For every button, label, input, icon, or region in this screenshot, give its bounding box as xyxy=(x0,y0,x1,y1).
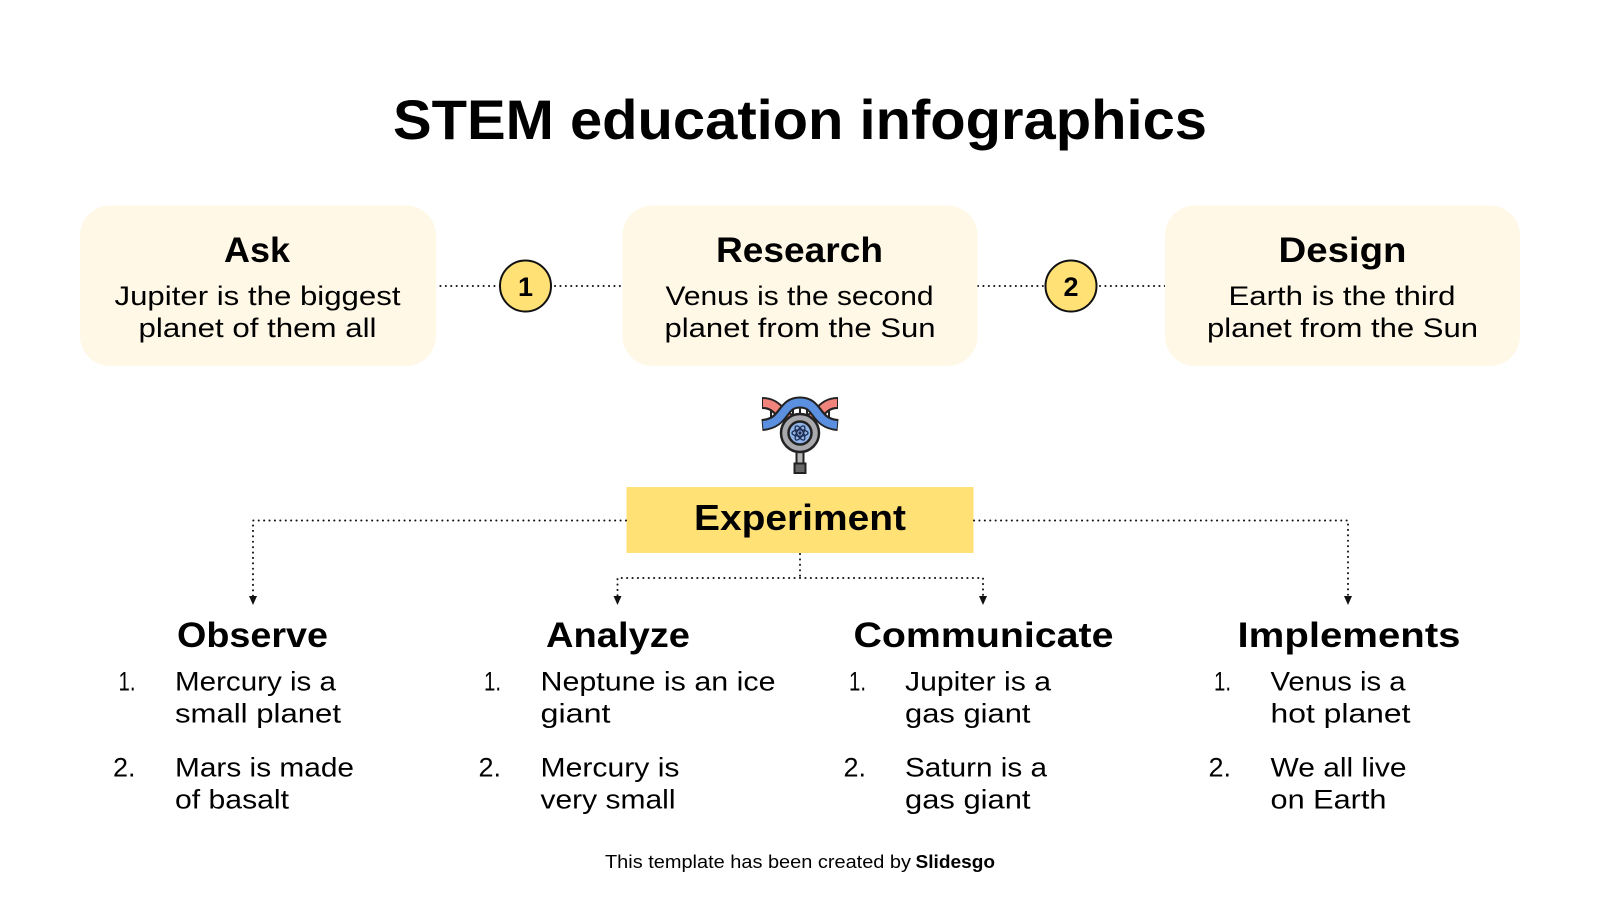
icon: DNA and atom magnifier xyxy=(762,402,838,473)
title: STEM education infographics xyxy=(393,88,1207,151)
text: Research description: Venus is the second xyxy=(666,281,934,311)
arrow: Experiment to Implements xyxy=(974,520,1352,605)
list: Observe items: 1. xyxy=(118,666,136,696)
list: Analyze items: Mercury is xyxy=(540,752,680,782)
list: Implements items: Venus is a xyxy=(1270,666,1407,696)
list: Communicate items: Saturn is a xyxy=(905,752,1048,782)
list: Implements items: hot planet xyxy=(1270,698,1411,728)
step badge 1 xyxy=(500,260,551,312)
text: Research description: planet from the Sun xyxy=(664,313,936,343)
list: Implements items: 1. xyxy=(1214,666,1231,696)
column: Communicate xyxy=(843,616,1114,814)
list: Analyze items: Neptune is an ice xyxy=(540,666,776,696)
heading: Research: Research xyxy=(716,231,883,270)
heading: Design: Design xyxy=(1278,231,1406,270)
box: Experiment: Experiment xyxy=(694,497,906,538)
text: Design description: planet from the Sun xyxy=(1207,313,1478,343)
list: Analyze items: very small xyxy=(540,784,676,814)
list: Analyze items xyxy=(478,666,776,814)
list: Implements items: 2. xyxy=(1208,752,1231,782)
text: Design description: Earth is the third xyxy=(1228,281,1456,311)
list: Observe items: 2. xyxy=(113,752,136,782)
column: Observe xyxy=(113,616,354,814)
text: Design description xyxy=(1207,281,1478,343)
list: Implements items xyxy=(1208,666,1411,814)
text: Research description xyxy=(664,281,936,343)
panel: Research xyxy=(622,206,978,366)
column: Implements xyxy=(1208,616,1460,814)
connector: Ask to Research xyxy=(435,285,622,287)
list: Analyze items: giant xyxy=(540,698,611,728)
list: Communicate items: Jupiter is a xyxy=(905,666,1052,696)
box: Experiment xyxy=(626,487,974,553)
list: Observe items: Mercury is a xyxy=(175,666,337,696)
column: Analyze xyxy=(478,616,776,814)
list: Communicate items: gas giant xyxy=(905,784,1031,814)
text: Ask description: planet of them all xyxy=(138,313,376,343)
step badge 1: 1 xyxy=(518,272,533,302)
list: Observe items: Mars is made xyxy=(175,752,354,782)
text: Ask description: Jupiter is the biggest xyxy=(114,281,401,311)
heading: Ask: Ask xyxy=(224,231,291,270)
arrow: Experiment to Observe xyxy=(249,520,626,605)
step badge 2 xyxy=(1046,260,1096,312)
heading: Analyze: Analyze xyxy=(546,616,690,655)
list: Analyze items: 1. xyxy=(484,666,501,696)
connector: Research to Design xyxy=(978,285,1165,287)
list: Observe items: small planet xyxy=(175,698,342,728)
heading: Observe: Observe xyxy=(177,616,328,655)
arrow: Experiment to Analyze and Communicate xyxy=(614,554,987,605)
panel: Ask xyxy=(80,206,436,366)
list: Implements items: We all live xyxy=(1270,752,1406,782)
list: Implements items: on Earth xyxy=(1270,784,1386,814)
list: Observe items xyxy=(113,666,354,814)
step badge 2: 2 xyxy=(1063,272,1079,302)
list: Communicate items: 2. xyxy=(843,752,866,782)
footer credit: Slidesgo xyxy=(916,852,995,872)
text: Ask description xyxy=(114,281,401,343)
list: Communicate items: 1. xyxy=(849,666,866,696)
heading: Implements: Implements xyxy=(1238,616,1460,655)
list: Communicate items xyxy=(843,666,1052,814)
panel: Design xyxy=(1165,206,1520,366)
list: Observe items: of basalt xyxy=(175,784,290,814)
list: Communicate items: gas giant xyxy=(905,698,1031,728)
footer credit: This template has been created by xyxy=(605,852,911,872)
heading: Communicate: Communicate xyxy=(854,616,1114,655)
list: Analyze items: 2. xyxy=(478,752,501,782)
